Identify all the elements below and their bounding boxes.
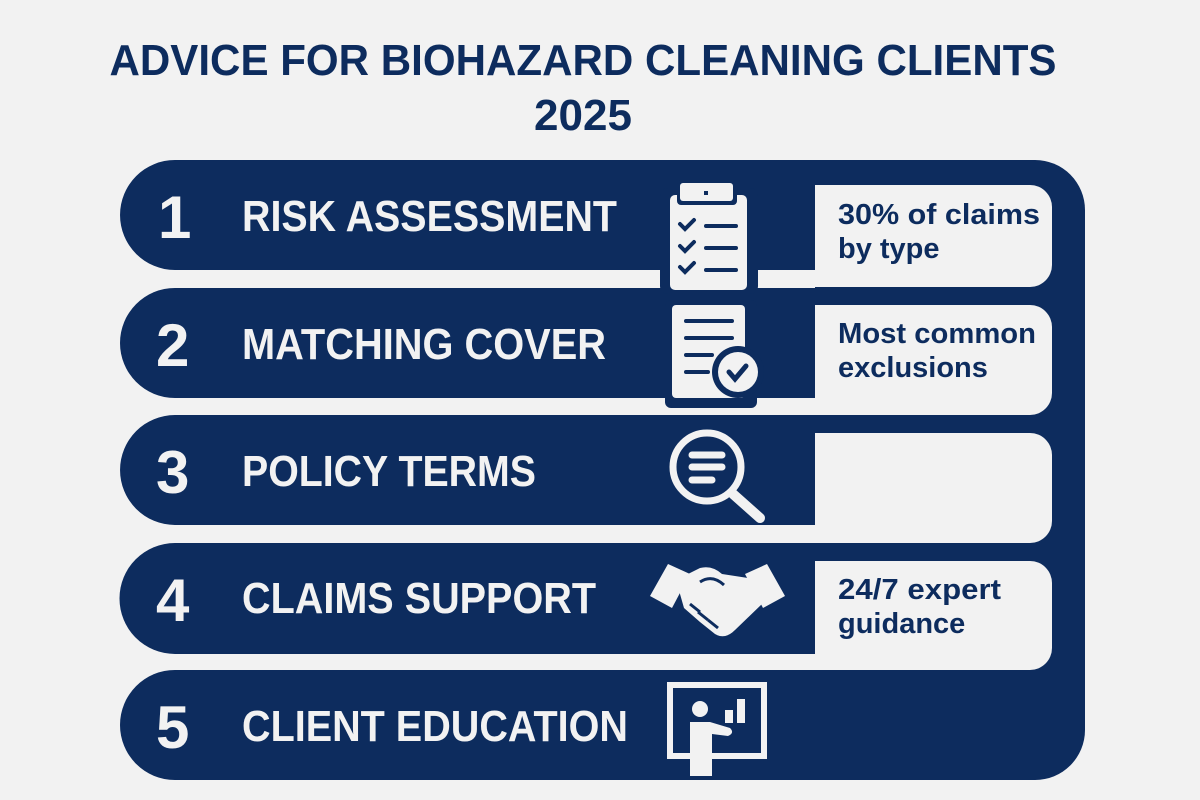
row 1: risk assessment: RISK ASSESSMENT [242, 192, 617, 241]
callout box 2 [815, 305, 1052, 415]
row 2: matching cover: 2 [156, 312, 189, 379]
callout box 4: guidance [838, 608, 965, 640]
callout box 1: by type [838, 233, 940, 265]
icon: clipboard checklist [660, 180, 758, 294]
row 5: client education [120, 670, 830, 780]
callout box 1: 30% of claims [838, 199, 1040, 231]
row 4: claims support: CLAIMS SUPPORT [242, 574, 596, 623]
callout box 1 [815, 185, 1052, 287]
icon: magnifier [673, 433, 760, 518]
title: ADVICE FOR BIOHAZARD CLEANING CLIENTS [110, 36, 1056, 85]
row 3: policy terms [120, 415, 830, 525]
row 4: claims support: 4 [156, 567, 190, 634]
row 1: risk assessment [120, 160, 830, 270]
callout box 2: exclusions [838, 352, 988, 384]
row 2: matching cover: MATCHING COVER [242, 320, 606, 369]
callout box 4 [815, 561, 1052, 670]
row 2: matching cover [120, 288, 830, 398]
right column background [815, 160, 1085, 780]
icon: document with check [665, 300, 764, 408]
row 1: risk assessment: 1 [158, 184, 191, 251]
title: 2025 [534, 91, 632, 140]
row 3: policy terms: 3 [156, 439, 189, 506]
callout box 3 (empty) [815, 433, 1052, 543]
row 4: claims support [120, 543, 830, 654]
icon: handshake [650, 564, 785, 636]
title [110, 36, 1056, 140]
callout box 4: 24/7 expert [838, 574, 1001, 606]
row 5: client education: 5 [156, 694, 189, 761]
callout box 2: Most common [838, 318, 1036, 350]
icon: presentation board [670, 685, 764, 776]
row 3: policy terms: POLICY TERMS [242, 447, 536, 496]
row 5: client education: CLIENT EDUCATION [242, 702, 628, 751]
